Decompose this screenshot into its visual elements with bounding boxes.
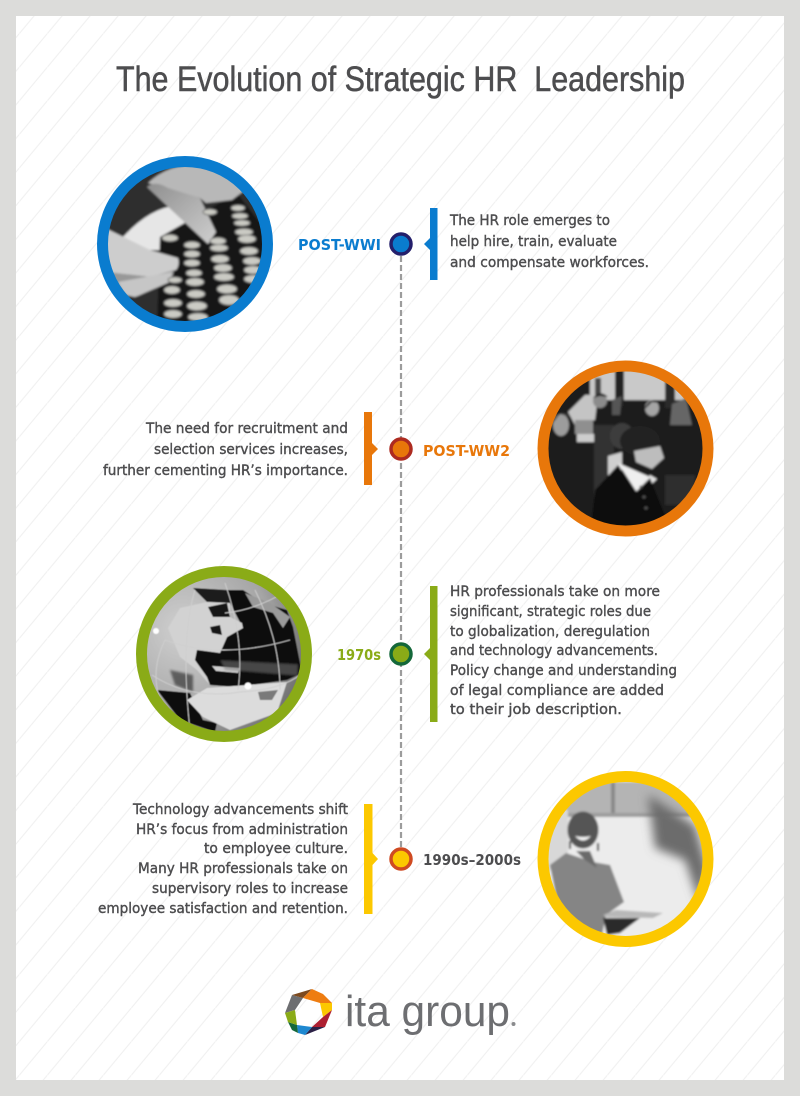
description	[450, 584, 677, 718]
description: HR’s focus from administration	[136, 822, 348, 838]
logo icon: multicolour ring	[285, 989, 332, 1035]
description: Policy change and understanding	[450, 663, 677, 679]
title: The Evolution of Strategic HR Leadership	[116, 60, 685, 99]
accent bar with pointer	[364, 804, 378, 914]
timeline marker: POST-WW2	[391, 439, 411, 459]
accent bar with pointer	[364, 412, 378, 485]
description: and compensate workforces.	[450, 255, 649, 271]
description	[103, 421, 348, 479]
timeline marker: 1990s-2000s	[391, 849, 411, 869]
label: 1990s-2000s: 1990s–2000s	[423, 851, 521, 869]
description: employee satisfaction and retention.	[98, 901, 348, 917]
description: The need for recruitment and	[145, 421, 348, 437]
photo: typewriter keys	[100, 160, 270, 330]
description: Many HR professionals take on	[138, 861, 348, 877]
description: supervisory roles to increase	[152, 881, 348, 897]
description: to globalization, deregulation	[450, 624, 650, 640]
timeline dashed line	[400, 256, 402, 848]
label: POST-WW2: POST-WW2	[423, 442, 510, 460]
milestone: post-WWI	[100, 160, 649, 330]
photo: smiling woman with tablet	[540, 775, 710, 945]
label: POST-WWI: POST-WWI	[298, 236, 381, 254]
description: help hire, train, evaluate	[450, 234, 617, 250]
photo: women at office machines	[540, 365, 710, 535]
milestone: 1990s-2000s	[98, 775, 710, 945]
timeline marker: POST-WWI	[391, 234, 411, 254]
label: 1970s: 1970s	[337, 646, 381, 664]
description: further cementing HR’s importance.	[103, 463, 348, 479]
description: Technology advancements shift	[132, 802, 348, 818]
description: to employee culture.	[204, 841, 348, 857]
timeline marker: 1970s	[391, 644, 411, 664]
description: HR professionals take on more	[450, 584, 660, 600]
description	[449, 213, 649, 271]
logo wordmark: ita group	[345, 987, 510, 1036]
logo: ita group	[285, 987, 516, 1036]
milestone: post-WW2	[103, 365, 710, 535]
milestone: 1970s	[140, 570, 677, 740]
description: of legal compliance are added	[450, 683, 664, 699]
photo: glass globe	[140, 570, 310, 740]
accent bar with pointer	[424, 208, 438, 280]
description: to their job description.	[450, 702, 622, 718]
logo period mark	[512, 1022, 516, 1026]
description: The HR role emerges to	[449, 213, 610, 229]
description: significant, strategic roles due	[450, 604, 651, 620]
accent bar with pointer	[424, 586, 438, 722]
description: selection services increases,	[154, 442, 348, 458]
description: and technology advancements.	[450, 643, 658, 659]
description	[98, 802, 348, 917]
